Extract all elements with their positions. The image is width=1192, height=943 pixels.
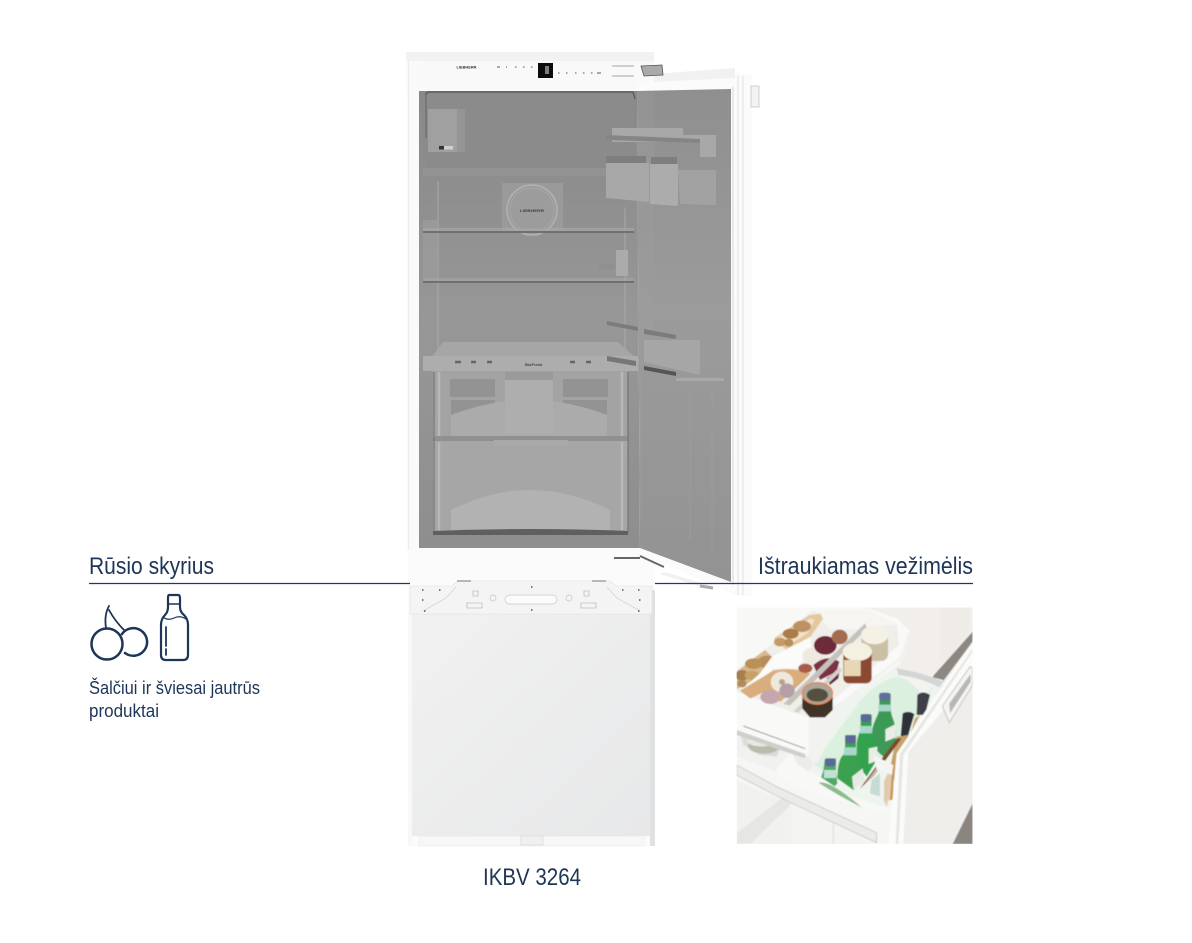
door shelves upper — [606, 128, 716, 206]
paper bag — [740, 669, 810, 702]
door shelves lower — [607, 321, 724, 381]
lower cabinet — [737, 736, 834, 844]
heading: Rūsio skyrius: Rūsio skyrius — [89, 553, 214, 580]
garlic — [771, 672, 793, 692]
crisper shelf: BioFresh — [525, 362, 543, 367]
connector line: right — [655, 582, 973, 584]
text: description: Šalčiui ir šviesai jautrūs — [89, 677, 260, 698]
wall and floor — [932, 608, 973, 682]
text: description — [89, 677, 260, 721]
basket — [774, 614, 823, 650]
photo: pull-out drawer — [735, 607, 973, 844]
rear wall: LIEBHERR — [520, 208, 544, 213]
slide rail — [737, 765, 877, 843]
top frame and side walls — [406, 52, 654, 550]
bowl holder — [737, 732, 792, 772]
interior cavity — [419, 91, 640, 548]
model name: IKBV 3264 — [483, 864, 581, 891]
jars — [860, 638, 888, 662]
upper crisper drawer — [433, 371, 628, 437]
hinge bottom — [614, 556, 664, 567]
onions — [814, 636, 837, 655]
crisper shelf — [423, 342, 638, 371]
connector line: left — [89, 582, 410, 584]
drawer front wall — [794, 756, 894, 811]
floor — [953, 803, 973, 844]
bottle drawer — [813, 668, 944, 772]
white basket side — [743, 637, 812, 690]
drawer interior — [737, 610, 899, 718]
refrigerator — [406, 52, 759, 846]
freezer box — [426, 92, 635, 168]
upper drawer — [735, 608, 909, 763]
rear wall — [423, 168, 634, 355]
control panel — [456, 63, 634, 78]
text: description: produktai — [89, 701, 159, 721]
open door — [606, 65, 759, 596]
icon: bottle — [161, 595, 188, 660]
rails — [783, 623, 867, 705]
heading: Ištraukiamas vežimėlis: Ištraukiamas vežimėlis — [758, 553, 973, 580]
bottles — [819, 692, 930, 807]
icon: cherries — [92, 606, 147, 660]
hinge top — [641, 65, 663, 76]
lower crisper drawer — [433, 436, 628, 535]
mounting plate — [410, 581, 652, 614]
control panel: LIEBHERR — [456, 64, 477, 70]
glass shelves — [423, 228, 634, 283]
door front — [888, 642, 973, 844]
lower body panel — [408, 548, 655, 846]
